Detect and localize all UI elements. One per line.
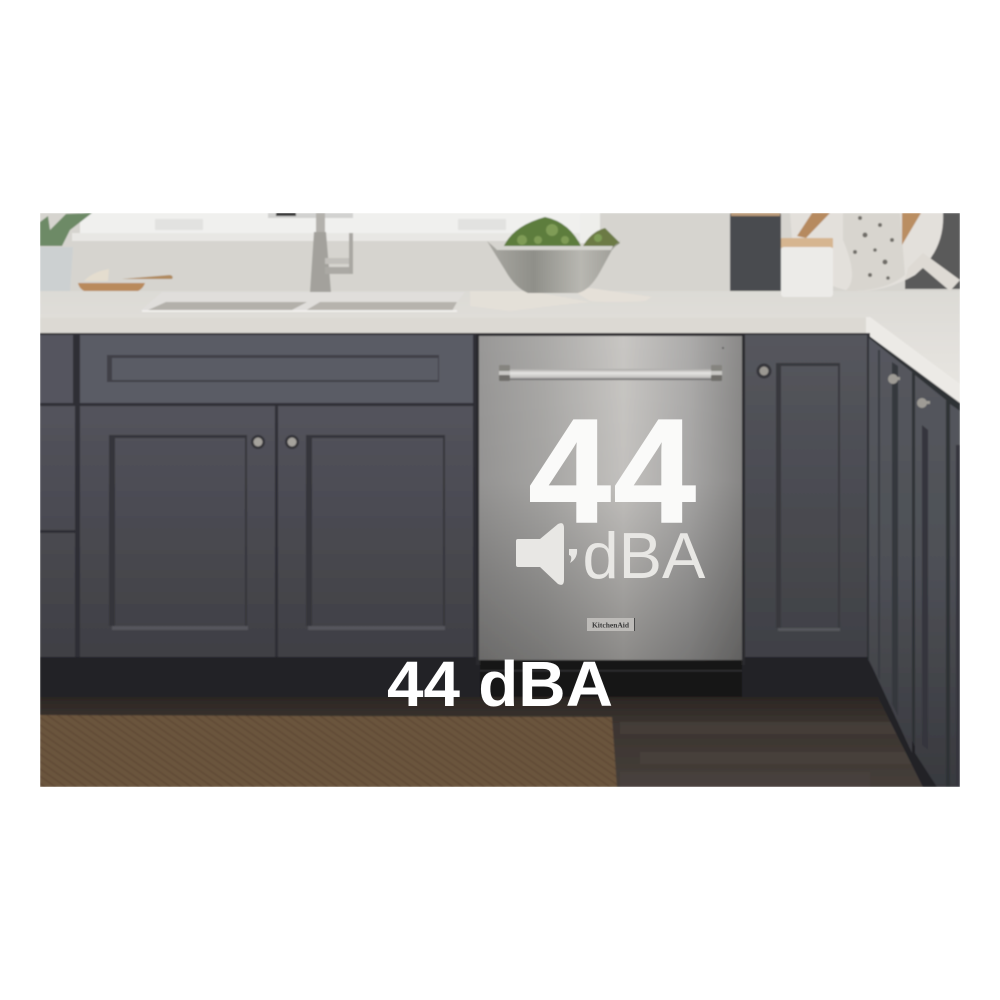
speaker icon xyxy=(516,523,577,585)
rug xyxy=(40,715,617,787)
faucet xyxy=(310,213,353,292)
side knobs xyxy=(888,374,930,408)
wall and window xyxy=(40,213,960,298)
kitchen photo xyxy=(40,213,960,787)
knob xyxy=(756,364,772,378)
plant in pot xyxy=(40,213,92,295)
dishwasher xyxy=(476,333,745,697)
white canister xyxy=(781,238,833,297)
knob xyxy=(251,435,265,449)
floor xyxy=(40,697,960,787)
dishwasher handle xyxy=(499,365,722,381)
left cabinet drawers xyxy=(40,335,75,657)
towel and plate xyxy=(524,288,644,297)
countertop xyxy=(40,291,960,405)
caption: 44 dBA xyxy=(387,648,613,720)
cutting boards xyxy=(790,213,960,291)
side cabinets xyxy=(868,335,960,787)
KitchenAid badge: KitchenAid xyxy=(592,620,630,630)
infographic canvas xyxy=(40,213,960,787)
dark canister xyxy=(730,213,781,292)
knob xyxy=(285,435,299,449)
colander with greens xyxy=(487,217,621,293)
floor planks xyxy=(620,722,895,732)
big number 44: 44 xyxy=(528,389,696,554)
upper drawer xyxy=(80,335,473,403)
toe grille xyxy=(480,660,742,697)
door beside dishwasher xyxy=(745,335,867,660)
dark backdrop behind boards xyxy=(905,213,960,289)
wooden dish with brush xyxy=(78,269,173,293)
dBA unit label: dBA xyxy=(582,519,706,592)
sink xyxy=(142,302,457,312)
toe kick xyxy=(40,657,880,697)
KitchenAid badge xyxy=(587,618,635,631)
left door xyxy=(80,406,275,657)
cabinet base xyxy=(40,333,870,663)
right door xyxy=(278,406,473,657)
